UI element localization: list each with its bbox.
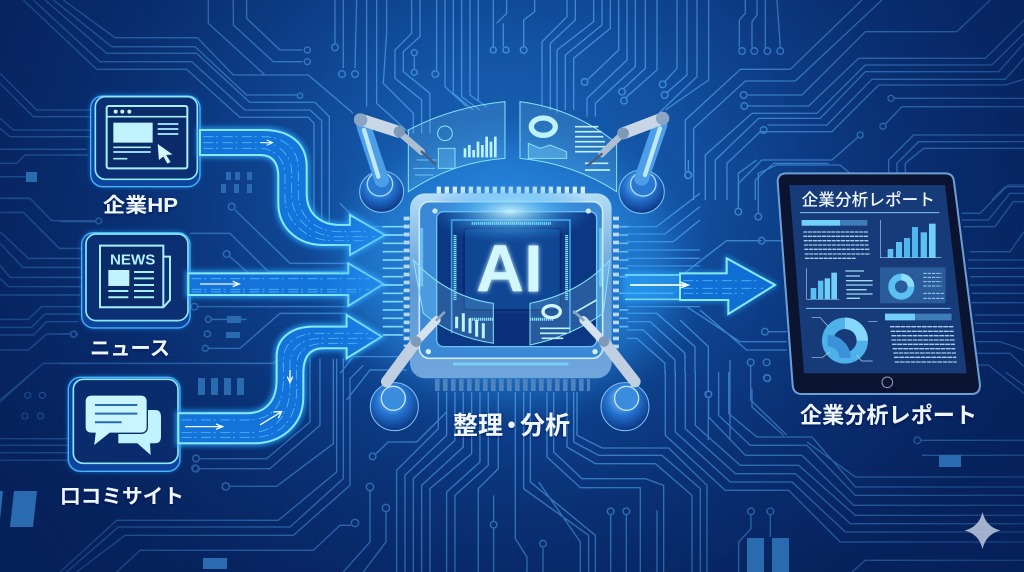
robot arm: top left	[354, 113, 435, 212]
tablet title: 企業分析レポート	[802, 190, 935, 209]
home button	[882, 377, 893, 388]
source card: 企業HP	[91, 95, 200, 187]
flow arrow: ニュース to AI	[188, 263, 383, 306]
small board components	[0, 172, 961, 572]
donut chart: middle	[880, 267, 946, 303]
source card: ニュース	[82, 232, 190, 328]
label: 口コミサイト: 口コミサイト	[60, 486, 184, 508]
tablet: 企業分析レポート	[778, 173, 980, 394]
panel: AI chip	[383, 180, 673, 385]
AI core	[464, 228, 561, 310]
source card: 口コミサイト	[68, 377, 180, 472]
label: 企業分析レポート: 企業分析レポート	[800, 403, 977, 428]
donut chart: bottom	[812, 317, 877, 361]
icon: newspaper: NEWS	[110, 252, 156, 268]
label: 整理・分析: 整理・分析	[453, 412, 570, 440]
robot arm: bottom left	[370, 313, 444, 431]
flow arrow: 企業HP to AI	[200, 130, 385, 255]
text block: bottom right	[885, 314, 957, 362]
sparkle mark	[964, 512, 1000, 549]
robot arm: bottom right	[574, 312, 649, 431]
robot arm: top right	[588, 112, 669, 213]
bar chart: middle left	[807, 268, 839, 299]
list bars	[845, 271, 873, 298]
text block: top left	[802, 220, 870, 258]
AI text: AI	[476, 233, 543, 307]
panel: upper left hologram	[408, 102, 505, 192]
output arrow to report	[625, 258, 775, 314]
panel: lower left hologram	[413, 260, 493, 343]
label: ニュース: ニュース	[90, 338, 170, 360]
icon: speech bubbles	[85, 395, 161, 455]
chip glow	[345, 145, 675, 395]
panel: lower right hologram	[530, 260, 610, 345]
label: 企業HP: 企業HP	[103, 194, 178, 217]
holographic panels	[408, 102, 617, 345]
robot arms	[354, 112, 669, 431]
chip pins	[383, 190, 673, 385]
icon: browser window with cursor	[107, 106, 187, 168]
chip body	[410, 193, 612, 378]
bar chart: top right	[880, 220, 942, 258]
flow arrow: 口コミサイト to AI	[178, 315, 382, 443]
panel: upper right hologram	[520, 102, 617, 192]
